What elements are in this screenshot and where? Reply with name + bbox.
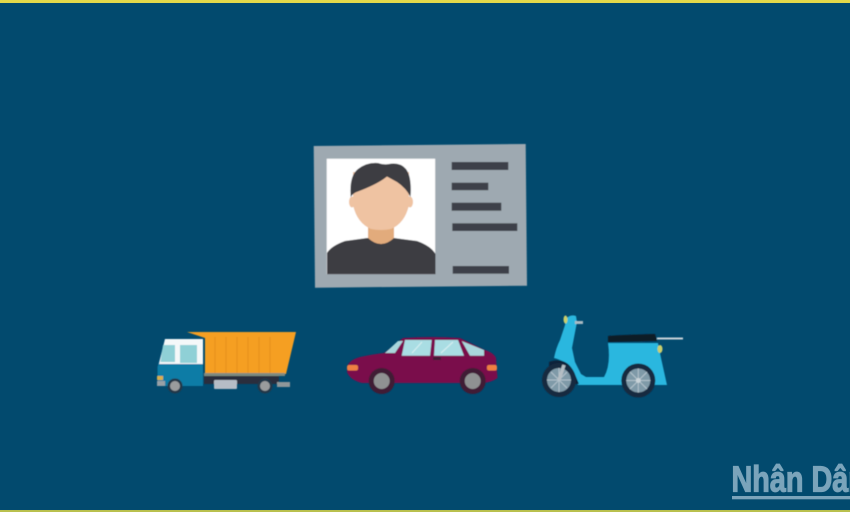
card text lines <box>452 162 517 274</box>
icon: scooter <box>542 315 683 398</box>
icon: dump truck <box>157 332 296 394</box>
ID photo <box>327 159 436 274</box>
icon: car <box>347 337 498 394</box>
license card <box>314 144 527 288</box>
